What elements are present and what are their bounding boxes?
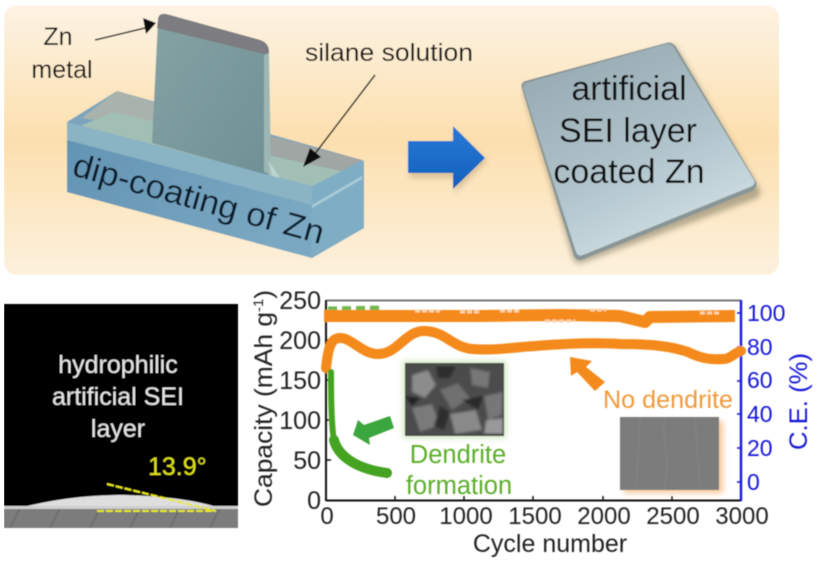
right axis labels: 20 [747, 435, 773, 461]
left axis labels: 50 [293, 447, 321, 475]
left axis title: Capacity (mAh g [250, 322, 278, 507]
label: sheet caption [553, 70, 705, 191]
right axis labels [747, 300, 785, 495]
bottom axis labels: 3000 [715, 503, 769, 530]
left axis labels [279, 287, 321, 515]
label: Dendrite formation: formation [406, 472, 512, 500]
illustration: silane tank with Zn metal plate [67, 14, 364, 258]
inset: dendrite SEM image [403, 361, 506, 438]
label: Zn metal [31, 23, 93, 84]
bottom axis labels: 500 [376, 503, 416, 530]
left axis labels: 200 [279, 327, 321, 355]
label: dip-coating of Zn: dip-coating of Zn [69, 146, 329, 251]
left axis title: ) [250, 290, 278, 299]
chart: capacity and coulombic efficiency vs cycle number [250, 287, 813, 558]
bottom axis labels: 2500 [646, 503, 700, 530]
label: Dendrite formation [406, 441, 512, 500]
arrow: silane solution pointer [303, 75, 375, 167]
panel: contact angle image [4, 304, 238, 528]
bottom axis labels: 1000 [439, 503, 493, 530]
label: sheet caption: SEI layer [559, 112, 697, 150]
label: hydrophilic artificial SEI layer: artificial SEI [52, 383, 184, 411]
bottom axis labels: 2000 [577, 503, 631, 530]
right axis labels: 40 [747, 401, 773, 427]
arrow: to dendrite curve [353, 416, 394, 445]
left axis labels: 0 [307, 487, 321, 515]
label: Dendrite formation: Dendrite [410, 441, 506, 469]
bottom axis labels: 1500 [508, 503, 562, 530]
arrow: Zn metal pointer [95, 18, 156, 40]
right axis labels: 80 [747, 334, 773, 360]
right axis title: C.E. (%) [785, 353, 813, 450]
illustration: artificial SEI layer coated Zn sheet [521, 42, 760, 264]
water droplet [18, 495, 220, 508]
series: coulombic efficiency, no dendrite [324, 310, 735, 322]
series: capacity, no dendrite [326, 331, 741, 368]
series: capacity, dendrite formation [331, 372, 387, 473]
label: hydrophilic artificial SEI layer: hydrophilic [58, 351, 178, 379]
label: hydrophilic artificial SEI layer: layer [91, 415, 145, 443]
bottom axis title: Cycle number [473, 530, 627, 558]
left axis title: -1 [250, 299, 266, 312]
axes frame [326, 300, 741, 501]
left axis labels: 150 [279, 367, 321, 395]
left axis labels: 100 [279, 407, 321, 435]
contact angle guide lines [97, 484, 216, 511]
label: Zn metal: Zn [43, 23, 73, 51]
panel: dip-coating process [4, 5, 779, 275]
arrow: to no dendrite curve [570, 357, 605, 391]
left axis labels: 250 [279, 287, 321, 315]
label: contact angle value: 13.9° [148, 453, 207, 481]
right axis labels: 0 [747, 469, 760, 495]
label: silane solution: silane solution [305, 39, 473, 67]
label: No dendrite: No dendrite [603, 386, 733, 414]
right axis labels: 60 [747, 367, 773, 393]
label: sheet caption: coated Zn [553, 153, 705, 191]
series: dendrite cell coulombic efficiency [328, 308, 384, 309]
label: sheet caption: artificial [571, 70, 687, 108]
inset: smooth Zn SEM image [620, 417, 723, 493]
Zn metal plate [152, 14, 280, 178]
arrow: process direction [408, 126, 487, 193]
label: Zn metal: metal [31, 56, 93, 84]
bottom axis labels [320, 503, 769, 530]
label: hydrophilic artificial SEI layer [52, 351, 184, 443]
right axis labels: 100 [747, 300, 785, 326]
bottom axis labels: 0 [320, 503, 334, 530]
